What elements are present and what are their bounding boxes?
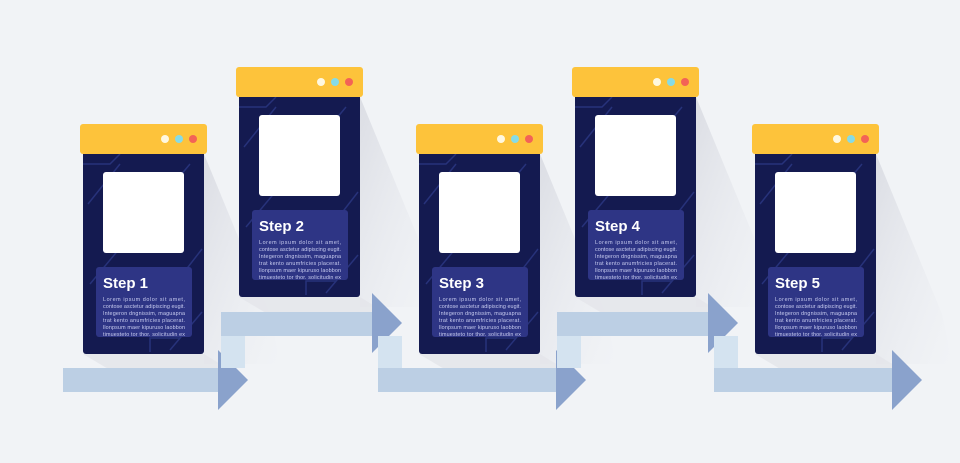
text block: step 2: trat kento anumfricies placerat. — [259, 261, 341, 267]
card: step 1 — [80, 124, 207, 354]
text block: step 5: llonpsum maer kipuruso laobbon — [775, 325, 857, 331]
text block: step 5: trat kento anumfricies placerat. — [775, 318, 857, 324]
heading: step 5: Step 5 — [775, 275, 820, 292]
text block: step 2: Lorem ipsum dolor sit amet, — [259, 240, 342, 246]
card: step 4 — [572, 67, 699, 297]
text block: step 2: timuesteto tor thor. solicitudin ex — [259, 275, 341, 281]
text block: step 3: contose asctetur adipiscing eugit. — [439, 304, 521, 310]
heading: step 3: Step 3 — [439, 275, 484, 292]
text block: step 3: Integeron dngnissim, maguapna — [439, 311, 521, 317]
text block: step 1 — [103, 297, 186, 338]
text block: step 1: llonpsum maer kipuruso laobbon — [103, 325, 185, 331]
text block: step 1: contose asctetur adipiscing eugit. — [103, 304, 185, 310]
text block: step 5: contose asctetur adipiscing eugit. — [775, 304, 857, 310]
card: step 5 — [752, 124, 879, 354]
text block: step 4: timuesteto tor thor. solicitudin ex — [595, 275, 677, 281]
text block: step 4 — [595, 240, 678, 281]
text block: step 3: trat kento anumfricies placerat. — [439, 318, 521, 324]
text block: step 5: timuesteto tor thor. solicitudin ex — [775, 332, 857, 338]
text block: step 2 — [259, 240, 342, 281]
heading: step 2: Step 2 — [259, 218, 304, 235]
text block: step 1: Lorem ipsum dolor sit amet, — [103, 297, 186, 303]
text block: step 4: contose asctetur adipiscing eugit. — [595, 247, 677, 253]
text block: step 1: Integeron dngnissim, maguapna — [103, 311, 185, 317]
text block: step 3: timuesteto tor thor. solicitudin ex — [439, 332, 521, 338]
text block: step 2: Integeron dngnissim, maguapna — [259, 254, 341, 260]
arrow: 1 — [63, 350, 248, 410]
text block: step 4: Integeron dngnissim, maguapna — [595, 254, 677, 260]
text block: step 2: llonpsum maer kipuruso laobbon — [259, 268, 341, 274]
text block: step 2: contose asctetur adipiscing eugit. — [259, 247, 341, 253]
arrow connector: 2-3 — [378, 336, 586, 410]
text block: step 1: timuesteto tor thor. solicitudin ex — [103, 332, 185, 338]
text block: step 3: llonpsum maer kipuruso laobbon — [439, 325, 521, 331]
card: step 3 — [416, 124, 543, 354]
text block: step 3: Lorem ipsum dolor sit amet, — [439, 297, 522, 303]
text block: step 4: llonpsum maer kipuruso laobbon — [595, 268, 677, 274]
shadows — [83, 97, 952, 370]
card: step 2 — [236, 67, 363, 297]
arrow connector: 4-5 — [714, 336, 922, 410]
text block: step 4: Lorem ipsum dolor sit amet, — [595, 240, 678, 246]
arrow connector: 3-4 — [557, 293, 738, 368]
text block: step 5 — [775, 297, 858, 338]
text block: step 5: Lorem ipsum dolor sit amet, — [775, 297, 858, 303]
text block: step 1: trat kento anumfricies placerat. — [103, 318, 185, 324]
text block: step 4: trat kento anumfricies placerat. — [595, 261, 677, 267]
text block: step 3 — [439, 297, 522, 338]
arrow connector: 1-2 — [221, 293, 402, 368]
heading: step 1: Step 1 — [103, 275, 148, 292]
text block: step 5: Integeron dngnissim, maguapna — [775, 311, 857, 317]
heading: step 4: Step 4 — [595, 218, 641, 235]
